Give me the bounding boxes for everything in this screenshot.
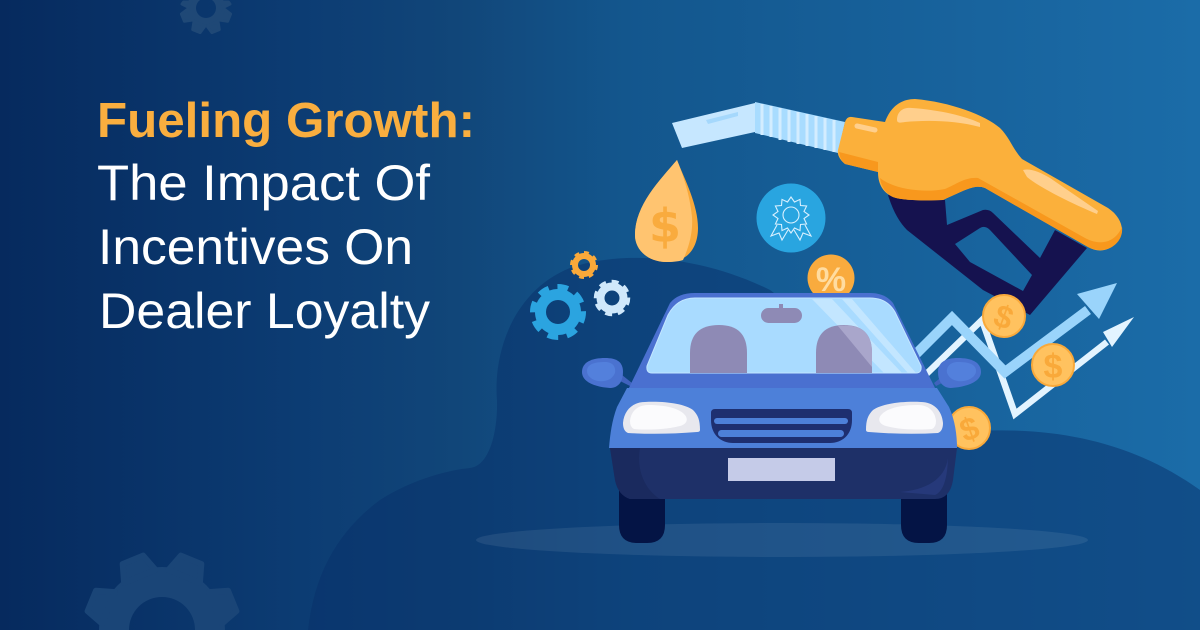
title line: highlighted: Fueling Growth: bbox=[97, 94, 475, 148]
icon: dollar coin under nozzle bbox=[983, 295, 1025, 337]
licence plate bbox=[728, 458, 835, 481]
orange nozzle shadow bbox=[839, 152, 1122, 250]
decorative gear: bottom bbox=[88, 556, 236, 630]
title line 2: The Impact Of bbox=[97, 155, 430, 211]
orange nozzle body bbox=[838, 99, 1122, 250]
background blob bbox=[308, 258, 1200, 630]
icon: dollar coin under nozzle: $ bbox=[989, 297, 1018, 337]
car bbox=[582, 293, 981, 543]
arrow: white growth arrow bbox=[915, 317, 1134, 414]
icon: blue gear bbox=[534, 288, 582, 336]
icon: dollar coin behind car: $ bbox=[955, 409, 984, 449]
title line 3: Incentives On bbox=[98, 219, 413, 275]
icon: dollar coin middle right: $ bbox=[1044, 348, 1063, 386]
right tyre bbox=[901, 490, 947, 543]
icon: fuel drop with dollar bbox=[635, 160, 698, 262]
decorative gear: top bbox=[181, 0, 231, 33]
bumper shading bbox=[610, 448, 660, 499]
nozzle spout tip bbox=[672, 103, 755, 148]
front bumper bbox=[610, 448, 957, 499]
left side mirror bbox=[582, 358, 632, 388]
windshield bbox=[647, 298, 921, 373]
arrow: light blue growth arrow bbox=[905, 283, 1117, 372]
windshield reflection bbox=[812, 299, 916, 373]
right seat bbox=[816, 325, 872, 373]
icon: light gear bbox=[596, 282, 628, 314]
title line 4: Dealer Loyalty bbox=[99, 283, 430, 339]
icon: award badge bbox=[756, 184, 826, 252]
background shadow ellipse under car bbox=[476, 523, 1088, 557]
spout highlight bbox=[706, 112, 738, 124]
roof and pillars bbox=[627, 293, 937, 392]
title bbox=[97, 94, 475, 339]
left tyre bbox=[619, 490, 665, 543]
orange nozzle handle highlight bbox=[1023, 169, 1098, 214]
dark trigger guard bbox=[888, 195, 1087, 315]
right side mirror bbox=[934, 358, 981, 388]
fuel nozzle bbox=[672, 99, 1122, 315]
icon: percent coin: % bbox=[816, 261, 846, 299]
rear-view mirror bbox=[761, 304, 802, 323]
left seat bbox=[690, 325, 747, 373]
icon: fuel drop with dollar: $ bbox=[649, 199, 681, 253]
grille bbox=[711, 409, 852, 443]
orange nozzle collar highlight bbox=[857, 126, 875, 130]
icon: percent coin bbox=[808, 254, 854, 302]
right headlight bbox=[866, 402, 943, 434]
hood bbox=[609, 388, 957, 448]
icon: dollar coin behind car bbox=[948, 407, 990, 449]
corrugated hose bbox=[755, 102, 845, 153]
right seat reflection bbox=[838, 326, 872, 367]
left headlight bbox=[623, 402, 700, 434]
icon: dollar coin middle right bbox=[1032, 344, 1074, 386]
icon: orange gear bbox=[572, 253, 596, 277]
orange nozzle body highlight bbox=[897, 108, 980, 127]
